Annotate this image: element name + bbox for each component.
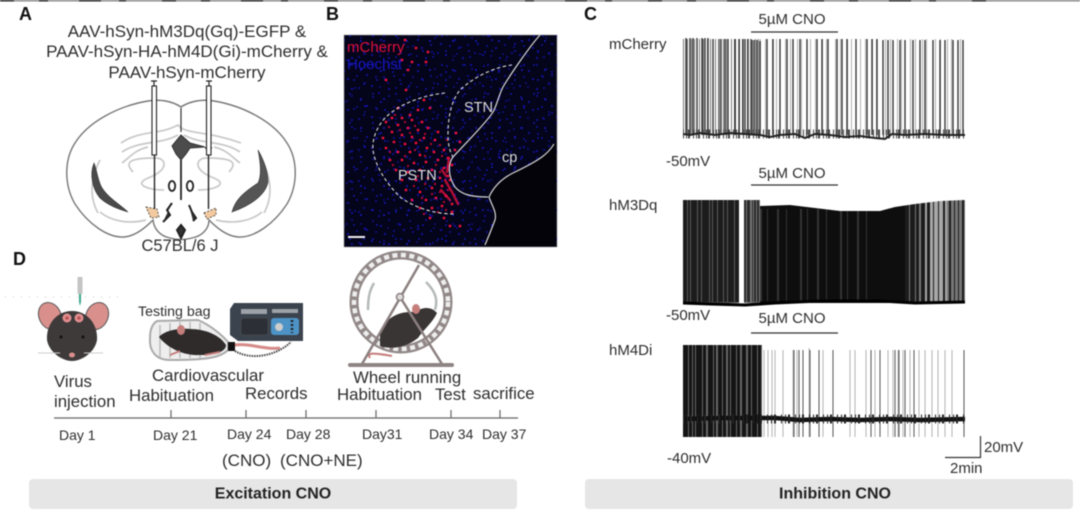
panel letter D: D <box>13 249 26 269</box>
trace: hM3Dq <box>609 165 965 324</box>
icon: mouse head with injection needle <box>34 277 113 361</box>
scale bar <box>945 436 1023 477</box>
trace: hM4Di <box>609 310 965 467</box>
trace: hM3Dq: -50mV <box>666 307 710 324</box>
day labels: Day 21 <box>153 427 198 443</box>
panel C: electrophysiology traces <box>584 4 1023 477</box>
stage labels: injection <box>54 392 116 411</box>
injection site: right <box>204 208 216 219</box>
panel D: experimental timeline <box>5 249 535 470</box>
label: mCherry: mCherry <box>347 39 405 56</box>
banner: Excitation CNO <box>29 479 517 509</box>
day labels: (CNO+NE) <box>280 451 363 470</box>
panel letter C: C <box>584 4 597 24</box>
icon: mouse in running wheel <box>348 255 454 367</box>
stage labels: Habituation <box>337 385 422 404</box>
day labels <box>59 426 527 470</box>
trace: mCherry <box>609 11 965 170</box>
virus construct list: PAAV-hSyn-HA-hM4D(Gi)-mCherry & <box>46 42 329 61</box>
stage labels: Wheel running <box>353 368 461 387</box>
stage labels: Virus <box>54 372 92 391</box>
banner: Inhibition CNO: Inhibition CNO <box>779 486 891 502</box>
day labels: Day31 <box>362 426 403 442</box>
trace: mCherry: -50mV <box>666 153 710 170</box>
trace: mCherry: mCherry <box>609 36 667 53</box>
scale bar: 2min <box>950 460 983 477</box>
trace: hM4Di: -40mV <box>667 450 711 467</box>
label: cp: cp <box>502 150 517 166</box>
trace: hM3Dq: 5µM CNO <box>759 165 825 182</box>
trace: hM3Dq: hM3Dq <box>609 197 657 214</box>
banner: Excitation CNO: Excitation CNO <box>215 486 331 502</box>
timeline axis <box>54 410 518 418</box>
stage labels: Cardiovascular <box>152 366 264 385</box>
label: STN: STN <box>464 100 493 116</box>
stage labels <box>54 366 535 411</box>
virus construct list: PAAV-hSyn-mCherry <box>108 63 266 82</box>
stage labels: Test <box>435 385 466 404</box>
trace: mCherry: 5µM CNO <box>759 11 825 28</box>
panel B: histology image <box>326 4 557 247</box>
fluorescence micrograph <box>344 35 557 247</box>
injection site: left <box>146 207 159 218</box>
trace: hM4Di: hM4Di <box>609 342 652 359</box>
icon: mouse in restraint bag <box>150 320 228 360</box>
syringe right <box>206 81 212 209</box>
icon: telemetry recording device <box>228 303 303 356</box>
stage labels: sacrifice <box>473 384 535 403</box>
panel letter A: A <box>19 4 32 24</box>
scale bar: 20mV <box>984 439 1023 456</box>
label: Hoechst: Hoechst <box>347 56 403 73</box>
virus construct list <box>46 22 329 82</box>
stage labels: Records <box>245 384 308 403</box>
day labels: (CNO) <box>222 451 271 470</box>
panel letter B: B <box>326 4 339 24</box>
label: testing bag: Testing bag <box>138 304 211 320</box>
day labels: Day 37 <box>482 426 527 442</box>
day labels: Day 28 <box>286 426 331 442</box>
day labels: Day 34 <box>429 426 474 442</box>
day labels: Day 24 <box>227 426 272 442</box>
banner: Inhibition CNO <box>585 479 1073 509</box>
mouse strain label: C57BL/6 J <box>141 237 219 255</box>
brain section diagram <box>67 81 295 240</box>
trace: hM4Di: 5µM CNO <box>759 310 825 327</box>
syringe left <box>151 81 157 209</box>
scale bar <box>348 236 365 238</box>
day labels: Day 1 <box>59 427 96 443</box>
virus construct list: AAV-hSyn-hM3Dq(Gq)-EGFP & <box>68 22 307 41</box>
stage labels: Habituation <box>129 386 214 405</box>
panel A: viral injection into brain <box>19 4 329 255</box>
label: PSTN: PSTN <box>398 168 437 184</box>
